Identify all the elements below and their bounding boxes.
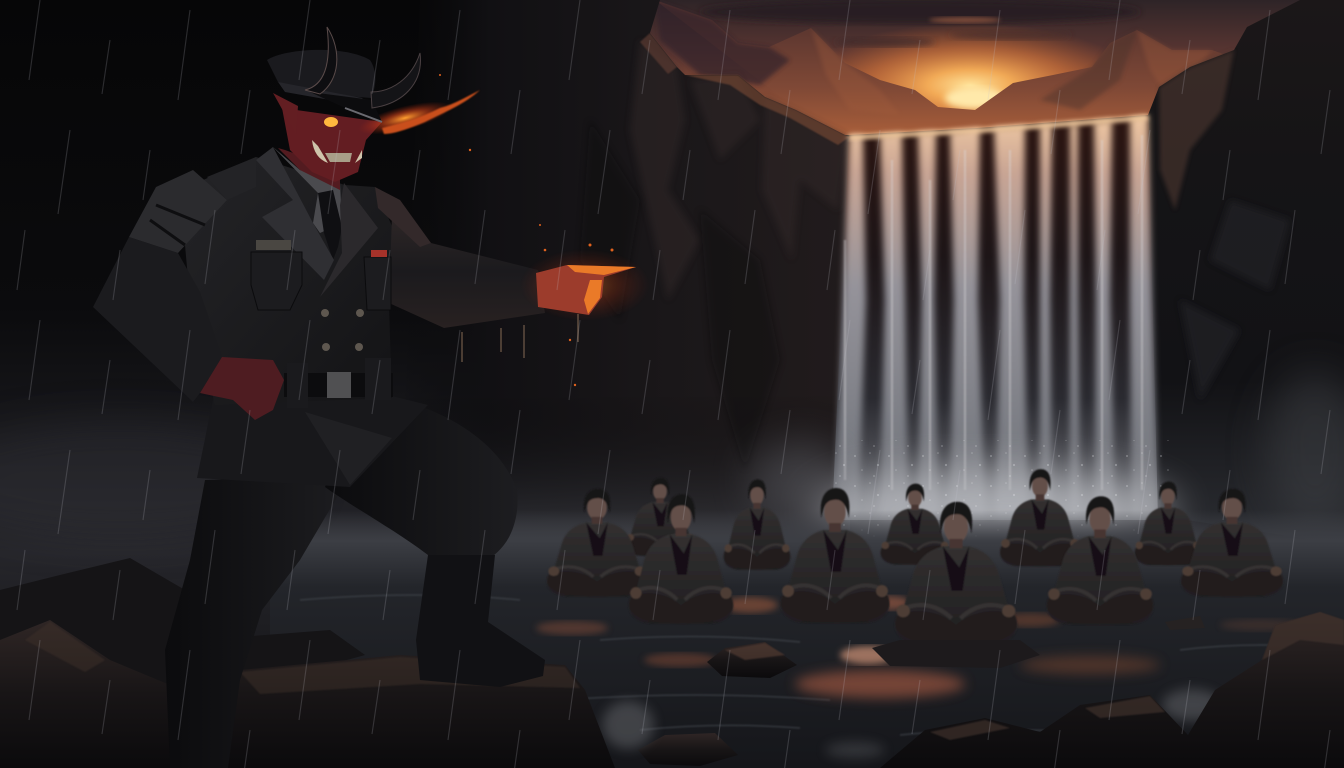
base spray [750,440,1175,548]
glowing eye and flame trail [324,90,480,141]
right lapel [320,183,378,297]
shirt collar [273,147,342,233]
neck [278,148,340,190]
glowing crest [849,115,1148,140]
waterfall [750,115,1175,548]
raised leg and thigh [325,408,518,558]
jacket torso [180,157,398,405]
demon officer [93,27,650,768]
fanged mouth [312,140,362,163]
chest pockets [251,252,391,310]
monks: back row [625,469,1201,570]
combat boot [416,555,545,687]
jacket skirt [197,390,428,487]
name plate and ribbon [256,240,387,257]
right cliff [1148,0,1344,545]
river water [270,510,1344,768]
shoulder armour [129,157,256,253]
horns [305,27,420,108]
rain drips under the sleeve [462,314,578,362]
rocks in the water [638,616,1205,766]
standing leg [165,475,350,768]
demon face [282,108,382,182]
left lapel [256,147,334,280]
officer cap [267,50,382,122]
sunset sky [650,0,1320,147]
epaulet [375,187,431,247]
brass buttons [321,309,364,351]
distant mountains [655,0,1240,135]
pointed ear [273,93,298,134]
sparks [439,74,614,386]
white foam around the rocks [602,689,1222,758]
sunset reflections on the water [536,596,1300,698]
water highlights [845,135,1142,490]
foreground rocks, left [0,558,615,768]
hand on hip [200,357,284,420]
monks: middle and front rows [547,488,1283,645]
pointing hand [520,249,650,321]
belt with pouches [284,358,393,408]
central cliff [400,0,850,545]
pointing arm sleeve [389,215,545,328]
foreground rocks, right [880,612,1344,768]
necktie [318,190,342,260]
falling water sheets [835,115,1158,520]
left arm bent to hip [93,237,222,402]
